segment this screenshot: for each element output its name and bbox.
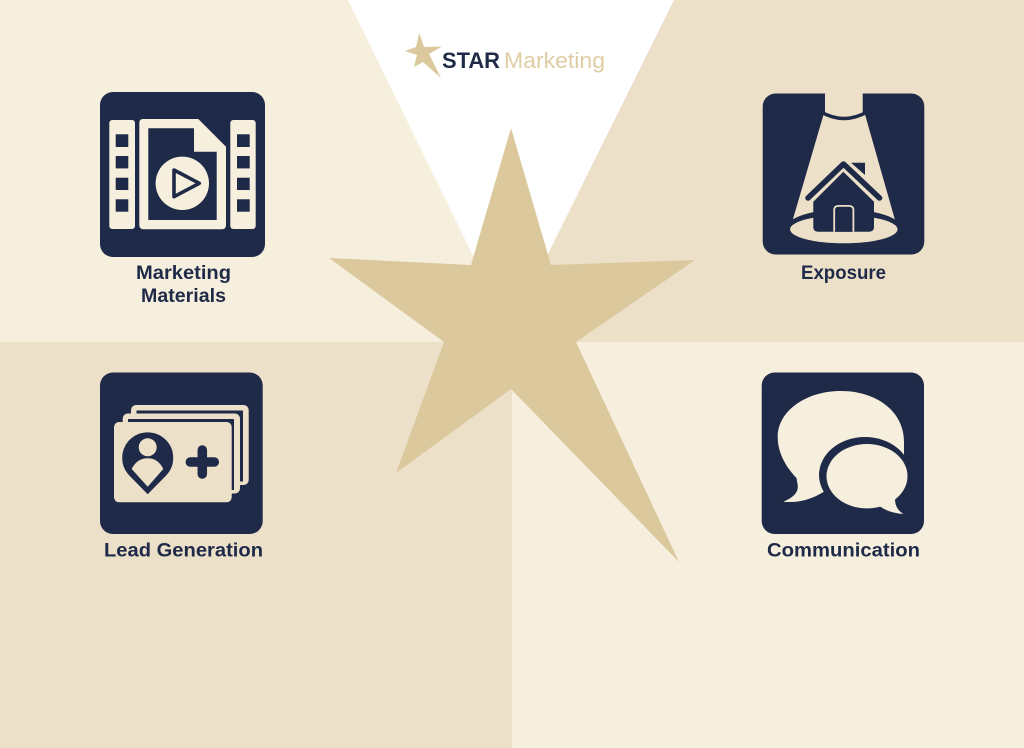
label: Exposure: Exposure — [801, 263, 886, 284]
label: Marketing Materials: Materials — [141, 286, 226, 307]
logo word STAR: STAR — [442, 48, 500, 73]
logo — [405, 33, 605, 78]
icon: lead cards with pin and plus — [100, 372, 263, 534]
panel: top left — [0, 0, 480, 342]
logo star — [405, 33, 442, 78]
label: Lead Generation: Lead Generation — [104, 541, 263, 562]
central star — [329, 128, 695, 562]
logo word Marketing: Marketing — [504, 48, 605, 73]
panel: top right — [540, 0, 1024, 342]
icon: film and video document — [100, 92, 265, 257]
icon: speech bubbles — [762, 372, 924, 534]
icon: house under spotlight — [763, 93, 924, 254]
label: Marketing Materials — [136, 263, 231, 307]
label: Marketing Materials: Marketing — [136, 263, 231, 284]
label: Communication: Communication — [767, 541, 920, 562]
panel: bottom left — [0, 342, 512, 748]
panel: bottom right — [512, 342, 1024, 748]
